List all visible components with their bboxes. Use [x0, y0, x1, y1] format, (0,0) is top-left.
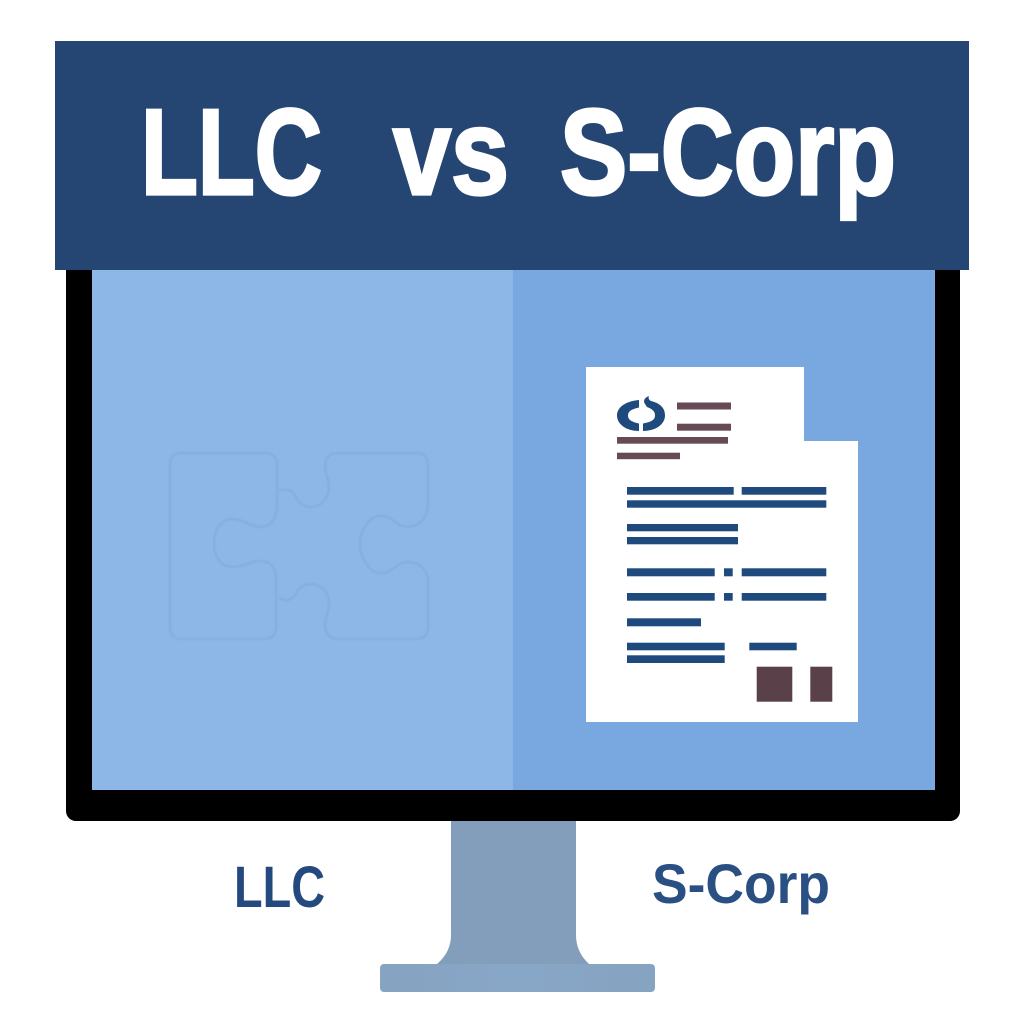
banner background	[55, 41, 969, 270]
stand base	[380, 964, 655, 992]
title: S-Corp	[560, 84, 896, 220]
icon: puzzle pieces	[170, 453, 428, 639]
monitor stand	[380, 815, 655, 992]
puzzle piece left	[170, 453, 277, 639]
label: LLC: LLC	[234, 855, 325, 920]
screen	[92, 270, 935, 790]
document header lines	[617, 402, 731, 459]
document body lines	[627, 487, 826, 663]
document sheet	[586, 367, 858, 722]
stand neck	[437, 815, 589, 964]
label: S-Corp: S-Corp	[652, 852, 830, 915]
puzzle piece right	[278, 453, 428, 639]
title banner	[55, 41, 969, 270]
title: vs	[393, 84, 509, 220]
document icon	[586, 367, 858, 722]
document logo	[617, 396, 665, 431]
monitor frame	[66, 240, 960, 821]
panel: S-Corp side	[513, 270, 935, 790]
title: LLC	[141, 84, 322, 220]
panel: LLC side	[92, 270, 513, 790]
document stamp squares	[757, 667, 832, 702]
title	[141, 84, 896, 220]
